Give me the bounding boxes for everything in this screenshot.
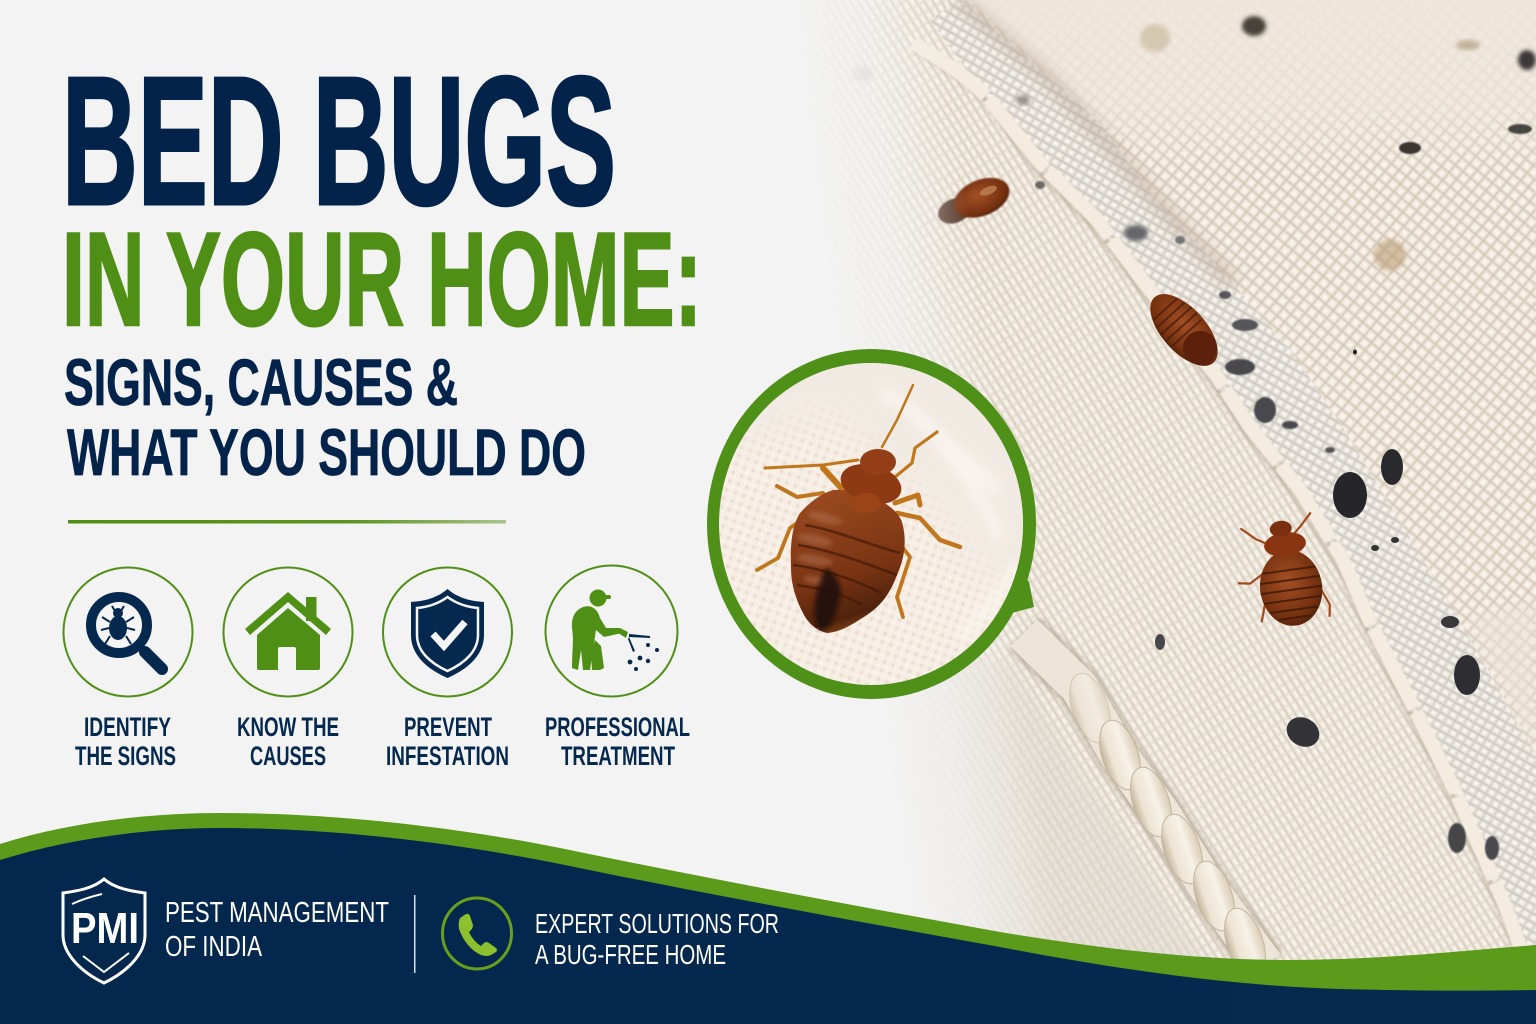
company name: PEST MANAGEMENT <box>165 897 389 929</box>
subtitle line 2: WHAT YOU SHOULD DO <box>67 415 586 489</box>
icon: professional treatment <box>546 566 678 696</box>
icon: prevent infestation <box>383 568 512 696</box>
spray droplets <box>628 634 659 671</box>
big bug thorax <box>840 464 902 504</box>
out-of-focus top of upper-right panel <box>970 0 1536 170</box>
caption 3 <box>386 712 509 771</box>
cloth folds <box>924 424 1020 638</box>
callout pointer <box>1000 575 1034 615</box>
big bug dark tail stripe <box>815 568 841 630</box>
caption 4 <box>545 712 690 771</box>
big bug head <box>860 449 896 472</box>
callout photo <box>719 363 1023 685</box>
tagline: A BUG-FREE HOME <box>535 939 726 970</box>
fabric panel: lower-left padded edge <box>900 660 1220 1024</box>
seam shadow <box>913 48 1519 960</box>
big bug neck <box>851 493 881 513</box>
title line 1: BED BUGS <box>62 38 616 243</box>
fabric panel: upper-right surface <box>970 0 1536 754</box>
big bug sheen <box>796 509 844 586</box>
subtitle line 1: SIGNS, CAUSES & <box>64 345 458 419</box>
footer divider <box>414 895 416 973</box>
icon ring <box>64 568 192 696</box>
icon captions <box>75 712 690 771</box>
house body <box>257 608 320 670</box>
rope piping <box>1024 633 1273 983</box>
tagline: EXPERT SOLUTIONS FOR <box>535 908 779 939</box>
icon: know the causes <box>224 568 352 696</box>
fabric panel: stitched seam strip <box>930 0 1536 960</box>
fabric panel: left mattress surface <box>700 0 1536 1024</box>
caption 2: KNOW THE <box>237 712 339 742</box>
rope shadow <box>1024 633 1265 965</box>
shield white line <box>417 597 478 671</box>
tagline <box>535 908 779 970</box>
house roof <box>245 592 331 635</box>
phone ring <box>442 898 512 969</box>
caption 1 <box>75 712 176 771</box>
caption 4: PROFESSIONAL <box>545 712 690 742</box>
icon ring <box>224 568 352 696</box>
shield outer <box>411 589 484 678</box>
callout ring <box>707 349 1036 699</box>
caption 2 <box>237 712 339 771</box>
caption 1: THE SIGNS <box>75 741 176 771</box>
caption 4: TREATMENT <box>561 741 675 771</box>
caption 2: CAUSES <box>250 741 326 771</box>
icon ring <box>546 566 678 696</box>
big bug abdomen ridges <box>793 525 900 605</box>
small bed bug: middle <box>1138 283 1230 377</box>
logo letters: PMI <box>71 904 139 953</box>
small bed bug: lower <box>1230 512 1332 633</box>
icon: identify the signs <box>64 568 192 696</box>
logo accents <box>72 894 129 972</box>
rope strands <box>1062 668 1273 983</box>
title line 2: IN YOUR HOME: <box>62 206 702 354</box>
divider rule <box>68 520 506 524</box>
technician figure <box>572 590 628 670</box>
magnifier bug <box>101 606 135 644</box>
big bug abdomen <box>791 490 905 633</box>
logo: PMI shield <box>63 879 145 983</box>
company name <box>165 897 389 963</box>
caption 3: INFESTATION <box>386 741 509 771</box>
logo outline <box>63 879 145 983</box>
phone handset <box>459 914 497 956</box>
footer band <box>0 813 1536 1024</box>
caption 3: PREVENT <box>404 712 492 742</box>
out-of-focus bottom-right corner <box>1470 600 1536 760</box>
callout circle with enlarged bed bug <box>707 349 1036 699</box>
footer green wave <box>0 813 1536 1024</box>
magnifier handle <box>145 652 162 669</box>
caption 1: IDENTIFY <box>84 712 171 742</box>
magnifier lens <box>91 597 147 653</box>
footer navy wave <box>0 828 1536 1024</box>
small bed bug: top <box>931 170 1015 232</box>
company name: OF INDIA <box>165 931 263 963</box>
blurred cloth upper part <box>736 363 1023 598</box>
title block <box>62 38 702 489</box>
icon row <box>64 566 678 696</box>
house chimney <box>306 597 316 621</box>
shadow along upper-right panel edge <box>960 0 1233 283</box>
stains: black and brown marks <box>851 16 1536 860</box>
lace cloth <box>719 363 1023 685</box>
icon: phone <box>442 898 512 969</box>
rope body <box>1024 633 1265 965</box>
icon ring <box>383 568 512 696</box>
shield check <box>433 622 465 646</box>
stitched seam line <box>913 43 1523 955</box>
big bug legs and antennae <box>757 385 960 617</box>
